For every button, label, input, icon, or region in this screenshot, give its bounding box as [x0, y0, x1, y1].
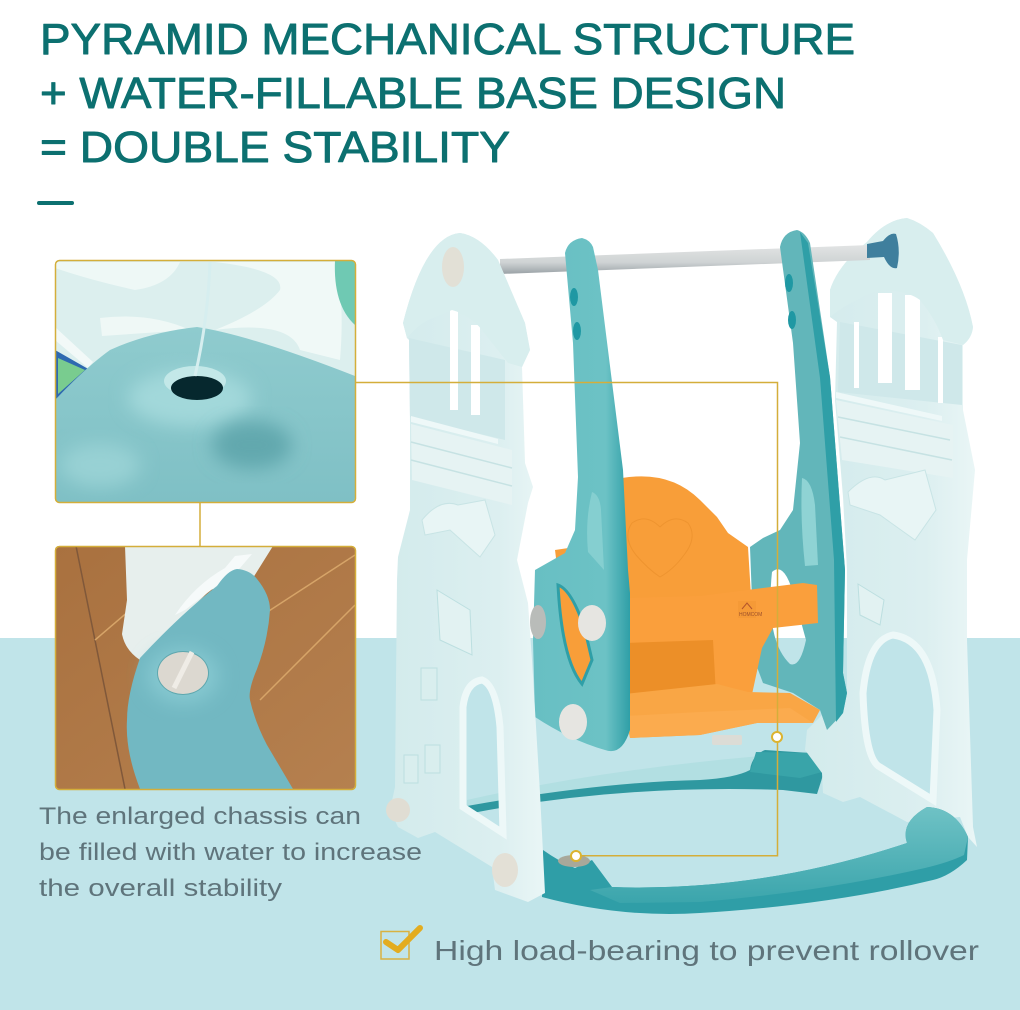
title: + WATER-FILLABLE BASE DESIGN — [40, 69, 786, 118]
title accent dash — [37, 201, 74, 205]
page background band — [0, 638, 1020, 1010]
left frame — [530, 238, 630, 751]
title: = DOUBLE STABILITY — [40, 123, 510, 172]
title — [40, 15, 855, 172]
detail photo: drain cap — [55, 546, 356, 790]
crossbar — [500, 234, 899, 274]
chassis description text — [39, 803, 422, 902]
title: PYRAMID MECHANICAL STRUCTURE — [40, 15, 855, 64]
connector end markers — [571, 732, 782, 861]
orange seat: HOMCOM — [739, 612, 762, 618]
right frame — [750, 230, 847, 730]
back base ring — [467, 750, 824, 814]
front base ring — [542, 807, 968, 914]
chassis description text: be filled with water to increase — [39, 839, 422, 866]
right tower — [805, 218, 977, 847]
icon: gold checkbox — [381, 928, 420, 959]
swing product illustration — [386, 218, 977, 914]
connector lines — [200, 382, 778, 856]
detail photo: water inlet — [55, 260, 356, 502]
left tower — [386, 233, 545, 902]
load-bearing callout: High load-bearing to prevent rollover — [434, 935, 979, 966]
chassis description text: The enlarged chassis can — [39, 803, 361, 830]
orange seat — [555, 476, 820, 745]
chassis description text: the overall stability — [39, 875, 282, 902]
